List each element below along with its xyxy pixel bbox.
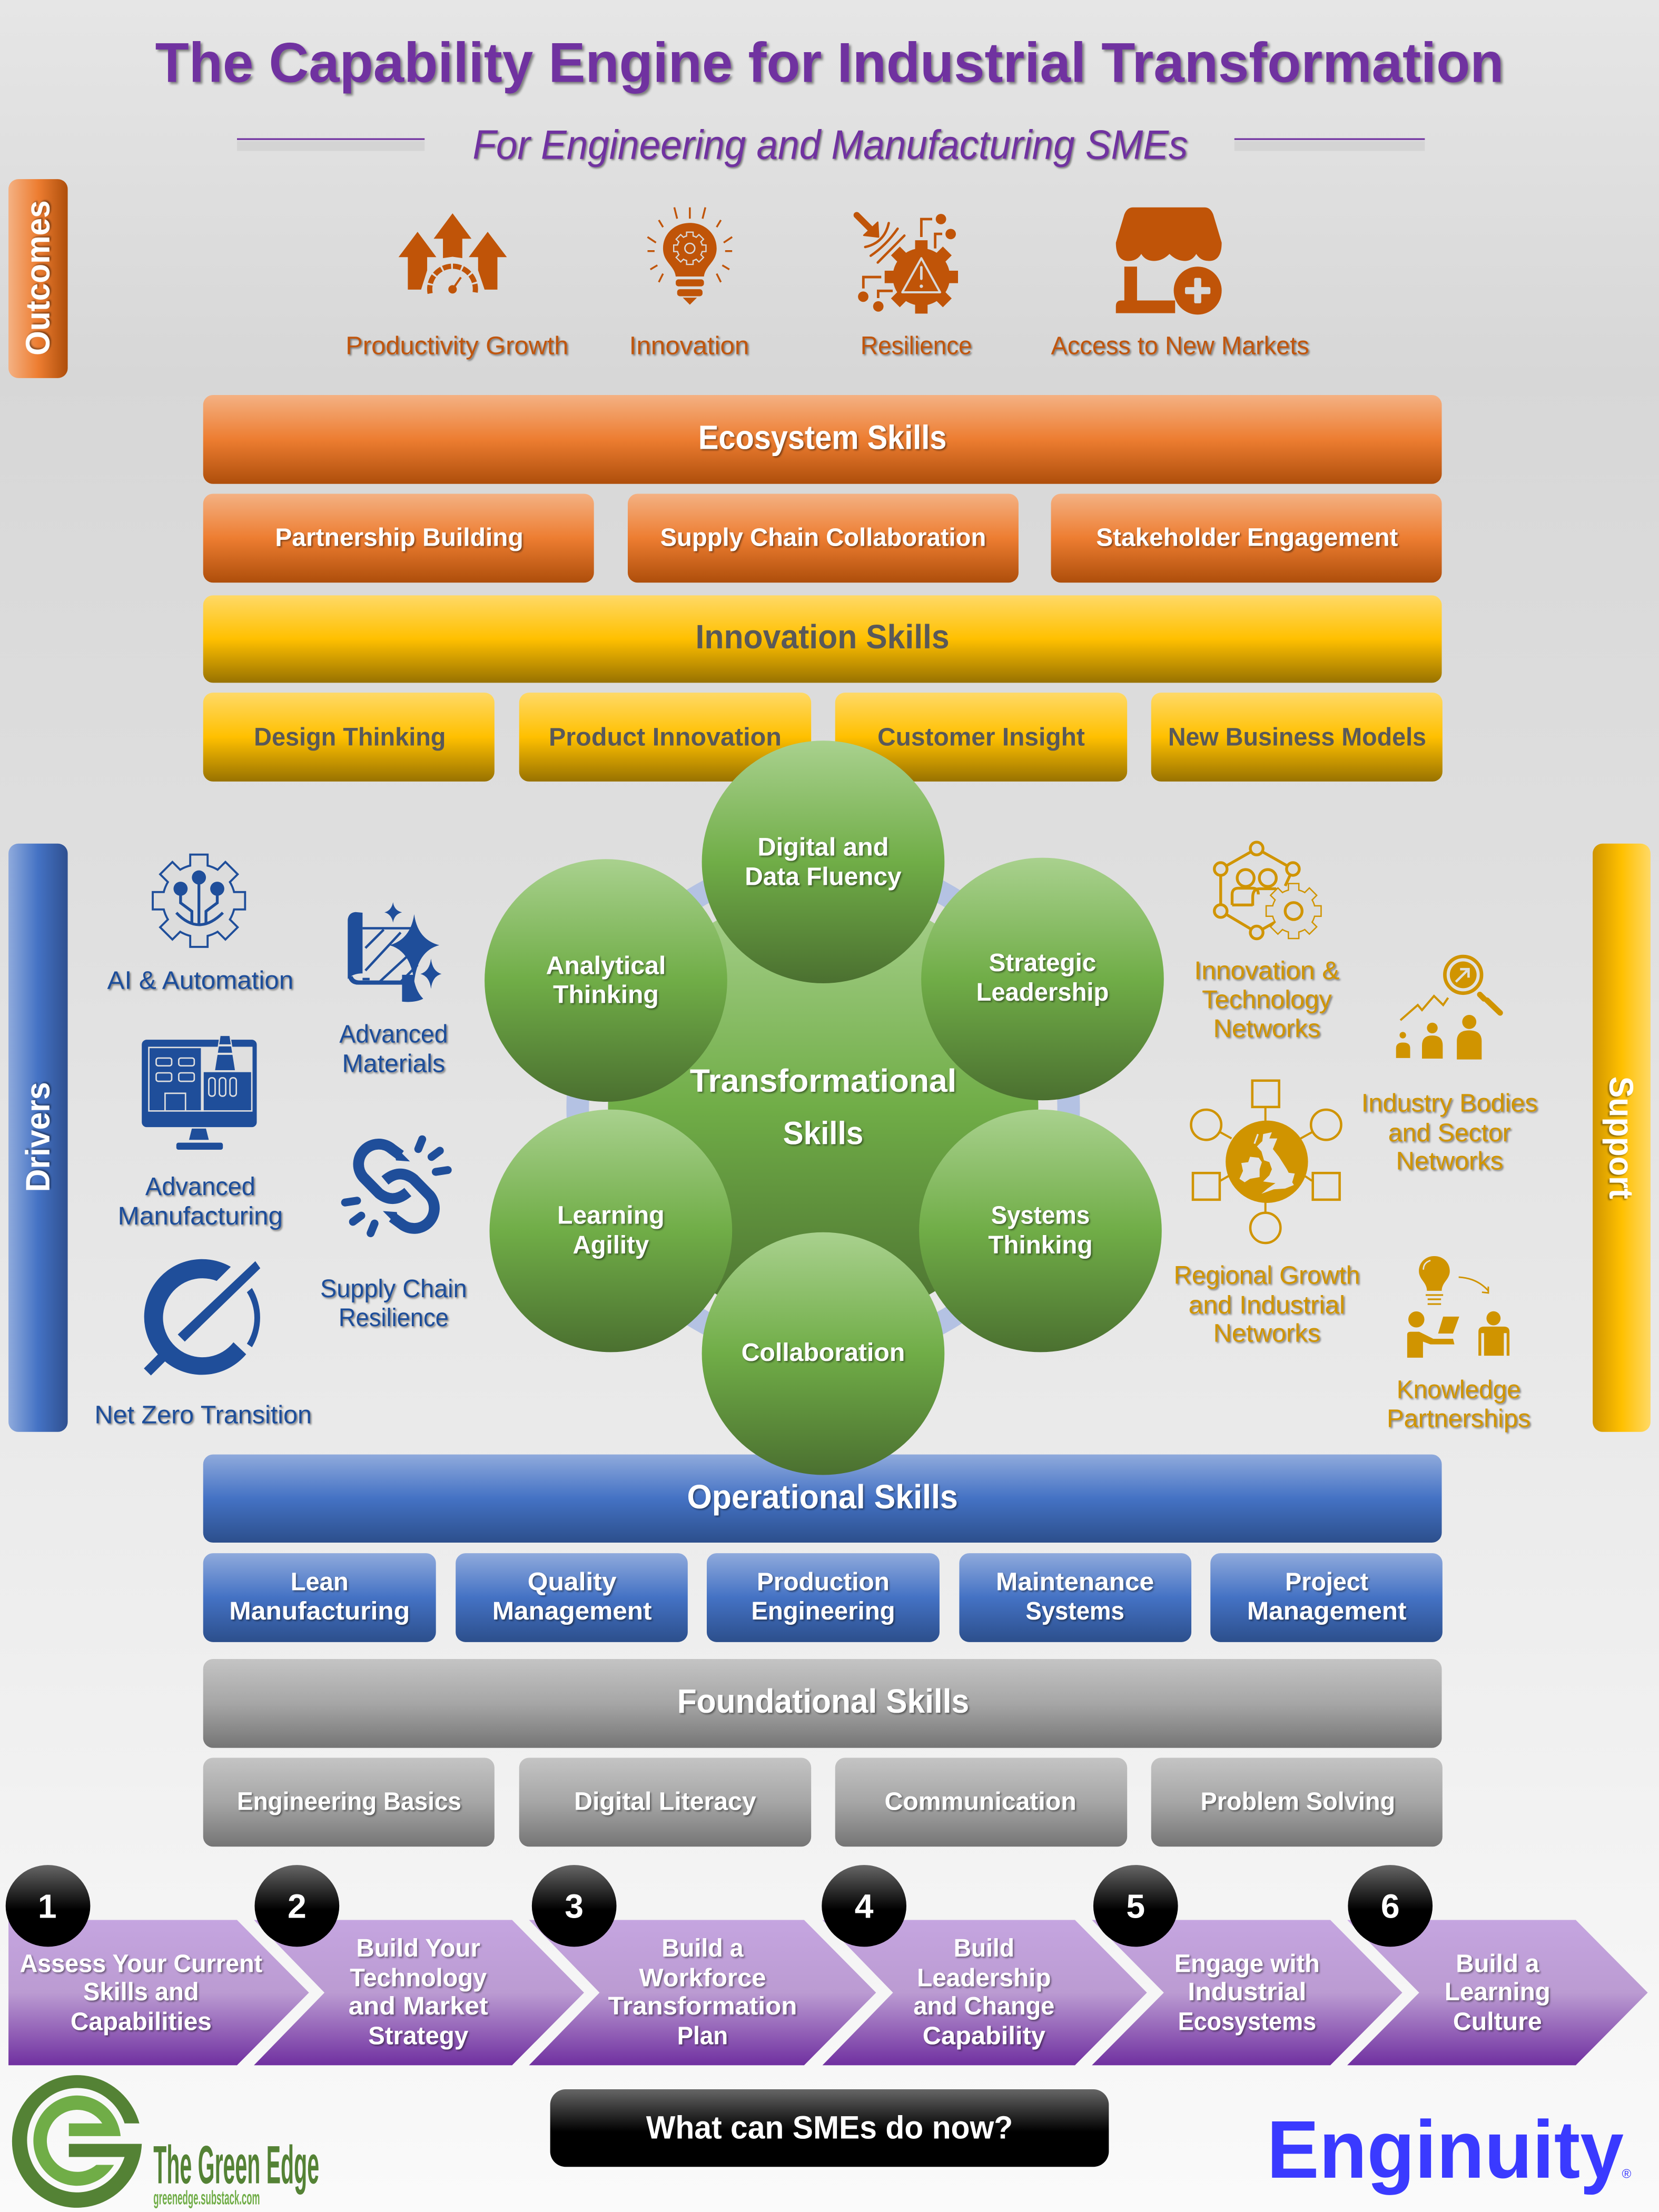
icon: advanced materials: [348, 902, 441, 1002]
panel: ecosystem skills: [203, 395, 1441, 582]
number badge 3: 3: [565, 1888, 584, 1925]
skill: product innovation: Product Innovation: [549, 723, 782, 751]
circle: digital and data fluency: Data Fluency: [745, 863, 902, 891]
heading bar: operational skills: Operational Skills: [687, 1478, 958, 1516]
label: supply chain resilience: Supply Chain: [320, 1275, 467, 1303]
label: advanced materials: Advanced: [339, 1020, 448, 1048]
step 4: leadership capability: Capability: [923, 2021, 1045, 2050]
number badge 5: 5: [1126, 1888, 1145, 1925]
skill: communication: Communication: [884, 1788, 1077, 1816]
icon: productivity growth: [399, 213, 507, 293]
skill: problem solving: Problem Solving: [1200, 1788, 1395, 1816]
icon: innovation networks: [1214, 842, 1320, 939]
label: innovation and technology networks: Networks: [1213, 1014, 1320, 1043]
number badge 1: [6, 1865, 90, 1947]
logo: Enginuity: Enginuity: [1267, 2104, 1624, 2195]
step 1: assess: [8, 1920, 309, 2065]
step 6: learning culture: Learning: [1445, 1978, 1551, 2006]
skill: partnership building: Partnership Building: [275, 524, 524, 552]
circle: strategic leadership: Strategic: [989, 949, 1096, 977]
label: advanced manufacturing: Manufacturing: [118, 1202, 283, 1230]
skill: quality management: [456, 1553, 688, 1642]
step 4: leadership capability: Build: [954, 1934, 1014, 1962]
circle: learning agility: [489, 1110, 732, 1352]
number badge 4: [822, 1865, 906, 1947]
skill: quality management: Management: [492, 1597, 652, 1625]
outcome label: innovation: Innovation: [629, 331, 749, 360]
step 4: leadership capability: Leadership: [917, 1963, 1051, 1992]
icon: net zero: [144, 1259, 260, 1376]
icon: innovation bulb: [647, 208, 732, 305]
skill: production engineering: Production: [757, 1568, 890, 1596]
skill: digital literacy: [519, 1758, 811, 1846]
panel: foundational skills: [203, 1659, 1443, 1846]
circle: collaboration: Collaboration: [742, 1338, 905, 1367]
icon: store with plus: [1116, 208, 1222, 314]
icon: resilience gear: [857, 214, 958, 313]
step 2: technology and market strategy: Strategy: [368, 2021, 468, 2050]
step 5: industrial ecosystems: Ecosystems: [1178, 2007, 1316, 2036]
label: advanced manufacturing: Advanced: [145, 1172, 255, 1201]
circle: strategic leadership: [921, 858, 1164, 1100]
step 1: assess: Skills and: [83, 1978, 199, 2006]
skill: maintenance systems: [959, 1553, 1191, 1642]
number badge 2: [254, 1865, 339, 1947]
skill: customer insight: [835, 693, 1127, 782]
icon: AI gear: [154, 856, 244, 946]
subtitle: [237, 122, 1425, 167]
outcome label: access to new markets: Access to New Markets: [1051, 331, 1309, 360]
callout: what can SMEs do now: [550, 2089, 1109, 2167]
icon: advanced manufacturing monitor: [142, 1035, 257, 1150]
skill: design thinking: Design Thinking: [254, 723, 446, 751]
step 3: workforce plan: Workforce: [639, 1963, 766, 1992]
label: supply chain resilience: Resilience: [339, 1303, 449, 1332]
step 4: leadership capability: and Change: [913, 1992, 1054, 2020]
heading bar: innovation skills: Innovation Skills: [696, 618, 950, 656]
skill: engineering basics: Engineering Basics: [237, 1788, 461, 1816]
label: advanced materials: Materials: [342, 1050, 445, 1078]
skill: lean manufacturing: [203, 1553, 436, 1642]
label: net zero transition: Net Zero Transition: [94, 1401, 312, 1429]
label: regional growth and industrial networks: Regional Growth: [1174, 1261, 1360, 1289]
step 1: assess: Assess Your Current: [20, 1950, 262, 1978]
step 1: assess: Capabilities: [71, 2007, 212, 2036]
skill: new business models: New Business Models: [1168, 723, 1426, 751]
outcome label: productivity growth: Productivity Growth: [345, 331, 568, 360]
icon: regional growth network with UK map: [1191, 1081, 1341, 1243]
label: AI and automation: AI & Automation: [107, 966, 293, 995]
skill: project management: [1210, 1553, 1443, 1642]
circle: strategic leadership: Leadership: [976, 978, 1109, 1006]
subtitle: For Engineering and Manufacturing SMEs: [472, 122, 1188, 167]
circle: learning agility: Agility: [573, 1231, 649, 1259]
label: regional growth and industrial networks: and Industrial: [1189, 1291, 1345, 1319]
centre circle: transformational skills: Skills: [783, 1115, 863, 1151]
centre circle: transformational skills: [608, 892, 1038, 1322]
step 3: workforce plan: [529, 1920, 876, 2065]
step 4: leadership capability: [823, 1920, 1147, 2065]
heading bar: innovation skills: [203, 595, 1441, 683]
step 6: learning culture: Culture: [1453, 2007, 1542, 2036]
circle: analytical thinking: [485, 859, 727, 1102]
panel: outcomes tab: [8, 179, 68, 378]
skill: design thinking: [203, 693, 495, 782]
circle: systems thinking: Systems: [991, 1201, 1090, 1229]
skill: customer insight: Customer Insight: [877, 723, 1085, 751]
panel: drivers tab: Drivers: [19, 1082, 57, 1192]
number badge 2: 2: [288, 1888, 307, 1925]
label: industry bodies and sector networks: Industry Bodies: [1361, 1089, 1538, 1118]
icon: knowledge partnerships: [1407, 1256, 1509, 1358]
circle: analytical thinking: Analytical: [546, 951, 666, 980]
panel: outcomes: [345, 208, 1309, 360]
icon: industry bodies: [1396, 956, 1500, 1060]
callout: what can SMEs do now: What can SMEs do now?: [646, 2110, 1013, 2146]
outer lavender ring: [578, 862, 1069, 1353]
skill: lean manufacturing: Manufacturing: [229, 1597, 410, 1625]
number badge 4: 4: [855, 1888, 874, 1925]
heading bar: foundational skills: Foundational Skills: [677, 1682, 969, 1720]
logo: The Green Edge: [12, 2075, 319, 2208]
skill: stakeholder engagement: Stakeholder Engagement: [1096, 524, 1398, 552]
panel: operational skills: [203, 1455, 1443, 1642]
skill: production engineering: Engineering: [751, 1597, 895, 1625]
title: The Capability Engine for Industrial Transformation: [155, 31, 1504, 94]
text: The Green Edge: [153, 2135, 319, 2195]
skill: lean manufacturing: Lean: [291, 1568, 349, 1596]
number badge 1: 1: [38, 1888, 57, 1925]
step 3: workforce plan: Plan: [677, 2021, 728, 2050]
label: industry bodies and sector networks: Networks: [1396, 1147, 1503, 1176]
skill: supply chain collaboration: Supply Chain Collaboration: [660, 524, 986, 552]
skill: communication: [835, 1758, 1127, 1846]
icon: supply chain broken link: [345, 1139, 448, 1233]
step 2: technology and market strategy: Build Your: [356, 1934, 480, 1962]
number badge 6: [1348, 1865, 1433, 1947]
circle: systems thinking: Thinking: [988, 1231, 1093, 1259]
logo: The Green Edge: greenedge.substack.com: [153, 2186, 260, 2208]
skill: digital literacy: Digital Literacy: [574, 1788, 756, 1816]
circle: learning agility: Learning: [557, 1201, 665, 1229]
label: innovation and technology networks: Technology: [1202, 985, 1332, 1014]
heading bar: ecosystem skills: [203, 395, 1441, 484]
skill: product innovation: [519, 693, 811, 782]
skill: maintenance systems: Maintenance: [996, 1568, 1154, 1596]
label: innovation and technology networks: Innovation &: [1194, 956, 1339, 985]
number badge 6: 6: [1381, 1888, 1400, 1925]
skill: quality management: Quality: [528, 1568, 617, 1596]
number badge 3: [532, 1865, 617, 1947]
circle: digital and data fluency: Digital and: [757, 833, 889, 861]
heading bar: foundational skills: [203, 1659, 1441, 1748]
step 6: learning culture: Build a: [1456, 1950, 1539, 1978]
step 2: technology and market strategy: Technology: [350, 1963, 487, 1992]
skill: project management: Management: [1247, 1597, 1407, 1625]
skill: maintenance systems: Systems: [1025, 1597, 1124, 1625]
skill: problem solving: [1151, 1758, 1443, 1846]
step 3: workforce plan: Build a: [661, 1934, 744, 1962]
panel: support tab: Support: [1602, 1077, 1640, 1199]
step 5: industrial ecosystems: [1092, 1920, 1402, 2065]
step 5: industrial ecosystems: Engage with: [1174, 1950, 1320, 1978]
panel: support tab: [1593, 844, 1651, 1432]
step 3: workforce plan: Transformation: [608, 1992, 797, 2020]
skill: partnership building: [203, 494, 594, 582]
step 2: technology and market strategy: [254, 1920, 584, 2065]
panel: six step roadmap: [6, 1865, 1648, 2065]
centre circle: transformational skills: Transformational: [690, 1063, 956, 1099]
logo: Enginuity: ®: [1622, 2167, 1632, 2181]
label: regional growth and industrial networks: Networks: [1213, 1319, 1320, 1347]
skill: engineering basics: [203, 1758, 495, 1846]
skill: supply chain collaboration: [628, 494, 1019, 582]
panel: support: [1174, 842, 1538, 1433]
number badge 5: [1093, 1865, 1178, 1947]
diagram: transformational skills cluster: [485, 740, 1164, 1475]
step 2: technology and market strategy: and Market: [349, 1992, 488, 2020]
skill: production engineering: [707, 1553, 940, 1642]
label: industry bodies and sector networks: and Sector: [1388, 1119, 1511, 1147]
label: knowledge partnerships: Partnerships: [1387, 1404, 1530, 1433]
panel: outcomes tab: Outcomes: [19, 200, 57, 355]
skill: stakeholder engagement: [1051, 494, 1442, 582]
outcome label: resilience: Resilience: [861, 331, 972, 360]
step 5: industrial ecosystems: Industrial: [1188, 1978, 1306, 2006]
step 6: learning culture: [1347, 1920, 1648, 2065]
circle: systems thinking: [919, 1110, 1162, 1352]
panel: drivers: [94, 856, 467, 1429]
circle: digital and data fluency: [702, 740, 944, 983]
panel: innovation skills: [203, 595, 1443, 782]
panel: drivers tab: [8, 844, 68, 1432]
circle: collaboration: [702, 1232, 944, 1475]
skill: new business models: [1151, 693, 1443, 782]
heading bar: ecosystem skills: Ecosystem Skills: [698, 419, 946, 457]
circle: analytical thinking: Thinking: [553, 980, 659, 1009]
label: knowledge partnerships: Knowledge: [1397, 1375, 1521, 1404]
skill: project management: Project: [1285, 1568, 1368, 1596]
heading bar: operational skills: [203, 1455, 1441, 1543]
